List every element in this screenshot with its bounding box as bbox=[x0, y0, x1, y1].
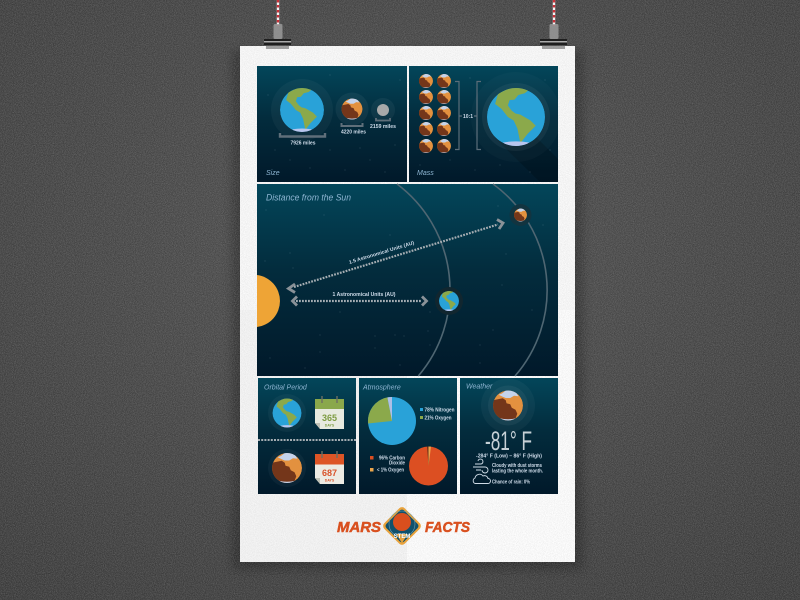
mars icons, ten bbox=[419, 74, 451, 153]
wordmark: facts: FACTS bbox=[425, 520, 470, 536]
mars diameter bracket and label: 4220 miles bbox=[341, 130, 366, 136]
icon: sun bbox=[257, 275, 280, 327]
icon: mars with halo bbox=[481, 378, 535, 432]
earth diameter bracket and label bbox=[280, 133, 325, 146]
icon: earth bbox=[435, 287, 463, 315]
moon diameter bracket and label: 2159 miles bbox=[370, 124, 396, 130]
panel: weather bbox=[460, 378, 558, 494]
ratio brackets and label: 10:1 bbox=[463, 114, 473, 120]
calendar: 365 days: DAYS bbox=[325, 424, 335, 428]
heading: mass: Mass bbox=[417, 170, 434, 177]
dotted divider bbox=[258, 439, 356, 441]
earth diameter bracket and label: 7926 miles bbox=[290, 140, 316, 146]
icon: earth bbox=[271, 79, 333, 141]
heading: weather: Weather bbox=[466, 384, 493, 390]
moon diameter bracket and label bbox=[370, 118, 396, 130]
legend: mars atmosphere bbox=[370, 456, 405, 474]
ratio brackets and label bbox=[455, 82, 481, 150]
weather description: lasting the whole month. bbox=[492, 468, 544, 474]
legend: earth atmosphere bbox=[420, 407, 454, 421]
icon: mars bbox=[336, 92, 368, 126]
icon: mars bbox=[510, 204, 532, 226]
legend: mars atmosphere: 96% Carbon bbox=[379, 456, 405, 462]
legend: earth atmosphere: 78% Nitrogen bbox=[424, 407, 454, 413]
panel: size bbox=[257, 66, 407, 182]
calendar: 365 days: 365 bbox=[322, 413, 337, 423]
weather description bbox=[492, 463, 544, 474]
pie chart: earth atmosphere bbox=[368, 397, 416, 445]
icon: cloud bbox=[473, 474, 490, 484]
wordmark: mars: MARS bbox=[337, 520, 381, 536]
calendar: 687 days: 687 bbox=[322, 468, 337, 478]
temperature: -81° F bbox=[485, 426, 532, 456]
icon: earth bbox=[268, 394, 306, 432]
heading: distance: Distance from the Sun bbox=[266, 192, 351, 204]
panel: mass bbox=[409, 66, 561, 182]
heading: orbital period: Orbital Period bbox=[264, 384, 308, 392]
arrow: mars distance bbox=[288, 220, 503, 292]
legend: mars atmosphere: Dioxide bbox=[389, 460, 405, 466]
heading: atmosphere: Atmosphere bbox=[362, 384, 401, 392]
panel: atmosphere bbox=[359, 378, 457, 494]
temperature range: -284° F (Low) – 86° F (High) bbox=[476, 454, 542, 460]
logo: mars stem facts bbox=[337, 505, 470, 547]
arrow: earth distance bbox=[292, 296, 426, 306]
weather description: Cloudy with dust storms bbox=[492, 463, 542, 469]
icon: earth large bbox=[471, 72, 561, 162]
heading: size: Size bbox=[266, 170, 280, 177]
binder clip right bbox=[540, 0, 567, 49]
emblem: stem diamond: STEM bbox=[394, 534, 410, 540]
legend: earth atmosphere: 21% Oxygen bbox=[424, 415, 452, 421]
icon: wind bbox=[473, 459, 488, 473]
calendar: 687 days bbox=[315, 451, 344, 484]
label: 1.5 AU: 1.5 Astronomical Units (AU) bbox=[348, 240, 415, 266]
calendar: 365 days bbox=[315, 396, 344, 429]
icon: moon bbox=[371, 98, 395, 122]
orbit lines bbox=[397, 184, 547, 376]
calendar: 687 days: DAYS bbox=[325, 478, 335, 482]
panel: distance from the sun bbox=[257, 184, 558, 376]
legend: mars atmosphere: < 1% Oxygen bbox=[377, 468, 404, 474]
mars diameter bracket and label bbox=[341, 123, 366, 136]
icon: mars bbox=[268, 449, 306, 487]
rain chance: Chance of rain: 0% bbox=[492, 480, 530, 486]
binder clip left bbox=[264, 0, 291, 49]
pie chart: mars atmosphere bbox=[409, 446, 448, 486]
panel: orbital period bbox=[258, 378, 356, 494]
label: 1 AU: 1 Astronomical Units (AU) bbox=[332, 292, 396, 298]
